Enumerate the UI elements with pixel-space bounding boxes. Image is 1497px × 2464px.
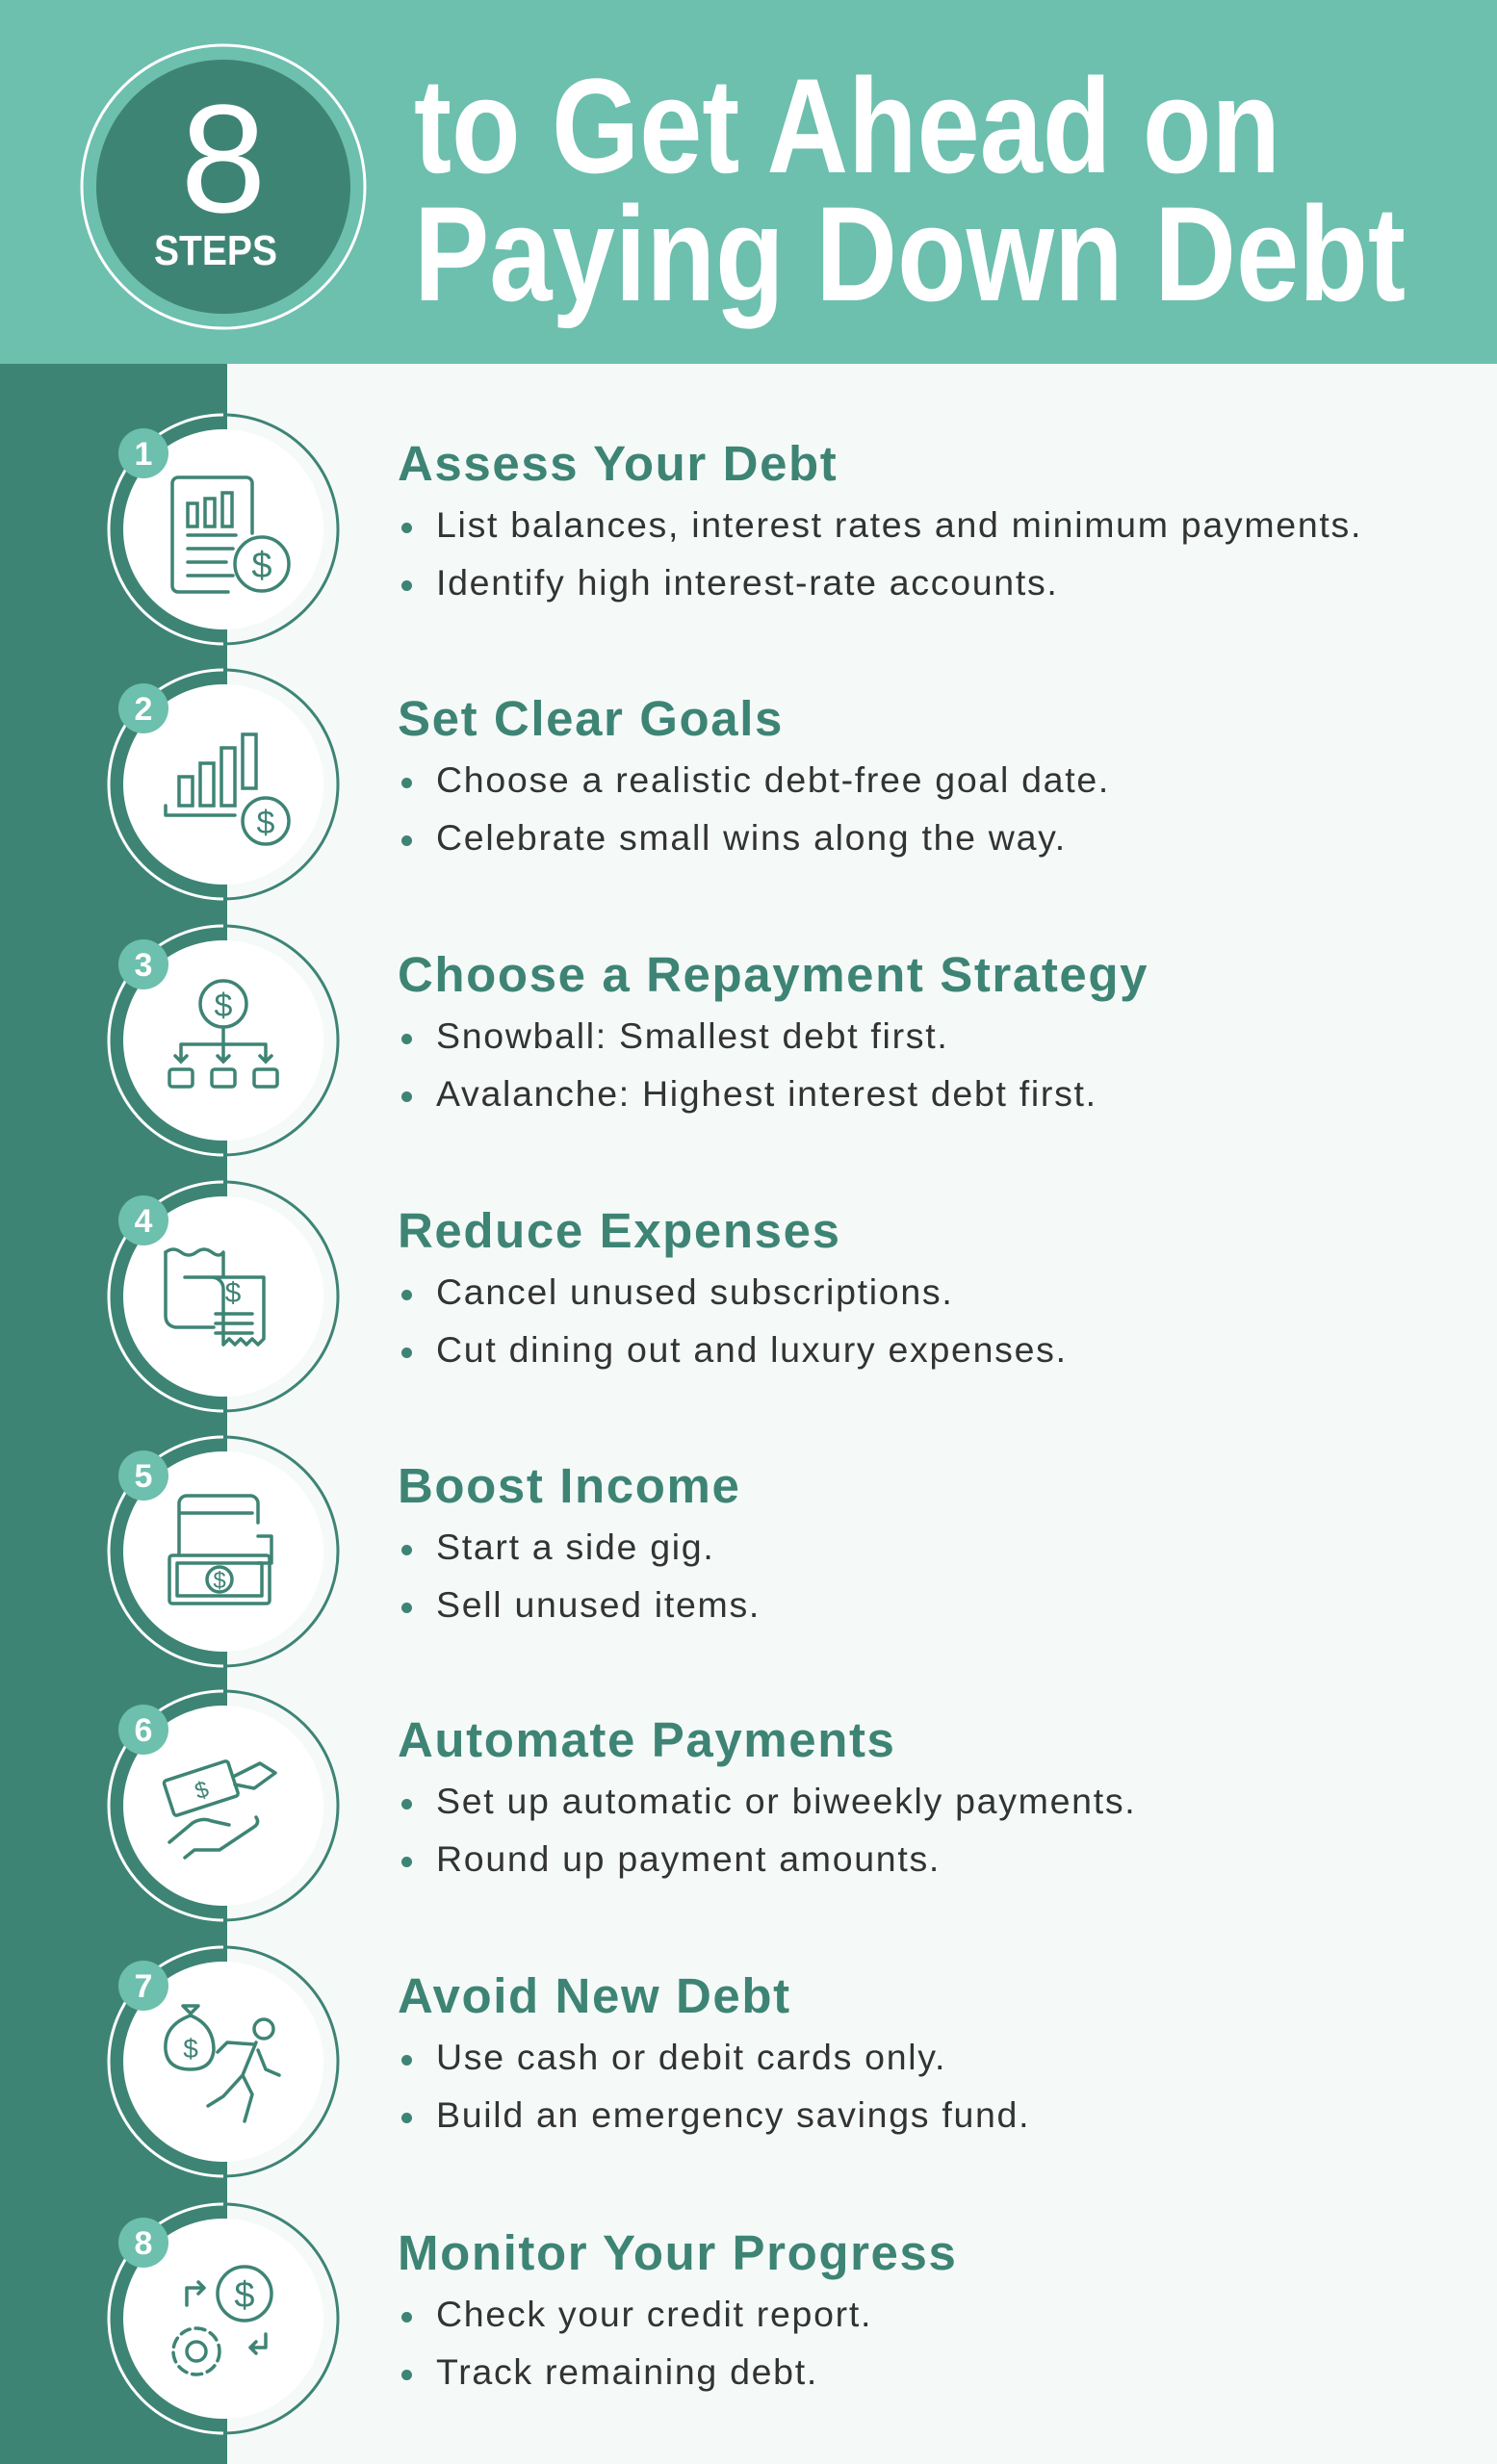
step 3: Avalanche: Highest interest debt first. [436, 1073, 1097, 1114]
header band [0, 0, 1497, 364]
step 3: Choose a Repayment Strategy [398, 947, 1149, 1002]
step 6: Set up automatic or biweekly payments. [436, 1781, 1136, 1821]
step 1: Identify high interest-rate accounts. [436, 562, 1059, 603]
step 8: Track remaining debt. [436, 2351, 818, 2392]
step 4: Cut dining out and luxury expenses. [436, 1329, 1068, 1370]
title [414, 50, 1406, 329]
badge: 8 steps [81, 44, 366, 329]
step 6: 6 [135, 1712, 152, 1749]
step 3: Snowball: Smallest debt first. [436, 1015, 948, 1056]
step 1: $ [251, 546, 272, 586]
step 6: Round up payment amounts. [436, 1838, 941, 1879]
step 8 [108, 2202, 957, 2435]
step 7: Build an emergency savings fund. [436, 2094, 1030, 2135]
step 4: $ [225, 1277, 242, 1309]
step 6: $ [192, 1776, 212, 1805]
step 4: Cancel unused subscriptions. [436, 1271, 953, 1312]
step 5: Boost Income [398, 1458, 740, 1513]
step 1: 1 [135, 436, 152, 473]
step 8: $ [234, 2275, 255, 2316]
step 6: Automate Payments [398, 1712, 896, 1767]
step 5: $ [213, 1568, 226, 1594]
step 5: Sell unused items. [436, 1584, 761, 1625]
step 8: 8 [135, 2225, 152, 2262]
step 5: 5 [135, 1458, 152, 1495]
step 7: 7 [135, 1968, 152, 2005]
step 2: 2 [135, 691, 152, 728]
badge: 8 steps: 8 [181, 72, 266, 244]
step 7: $ [183, 2034, 198, 2064]
step 1: Assess Your Debt [398, 436, 838, 491]
step 2 [108, 668, 1110, 901]
step 8: Check your credit report. [436, 2294, 872, 2334]
title: to Get Ahead on [414, 50, 1280, 201]
badge: 8 steps: STEPS [154, 227, 277, 274]
step 6 [108, 1690, 1136, 1921]
step 4: Reduce Expenses [398, 1203, 841, 1258]
step 4 [108, 1180, 1068, 1413]
step 5: Start a side gig. [436, 1527, 714, 1567]
step 7 [108, 1946, 1030, 2177]
step 4: 4 [135, 1203, 153, 1240]
step 7: Use cash or debit cards only. [436, 2037, 946, 2077]
step 7: Avoid New Debt [398, 1968, 791, 2023]
step 2: Set Clear Goals [398, 691, 784, 746]
step 2: $ [257, 805, 275, 841]
step 3: $ [215, 988, 233, 1024]
step 3 [108, 924, 1149, 1157]
step 2: Celebrate small wins along the way. [436, 817, 1067, 858]
step 1: List balances, interest rates and minimum payments. [436, 504, 1362, 545]
step 1 [108, 414, 1362, 645]
step 5 [108, 1436, 761, 1667]
step 3: 3 [135, 947, 152, 984]
left dark band [0, 364, 227, 2464]
step 8: Monitor Your Progress [398, 2225, 957, 2280]
step 2: Choose a realistic debt-free goal date. [436, 759, 1110, 800]
